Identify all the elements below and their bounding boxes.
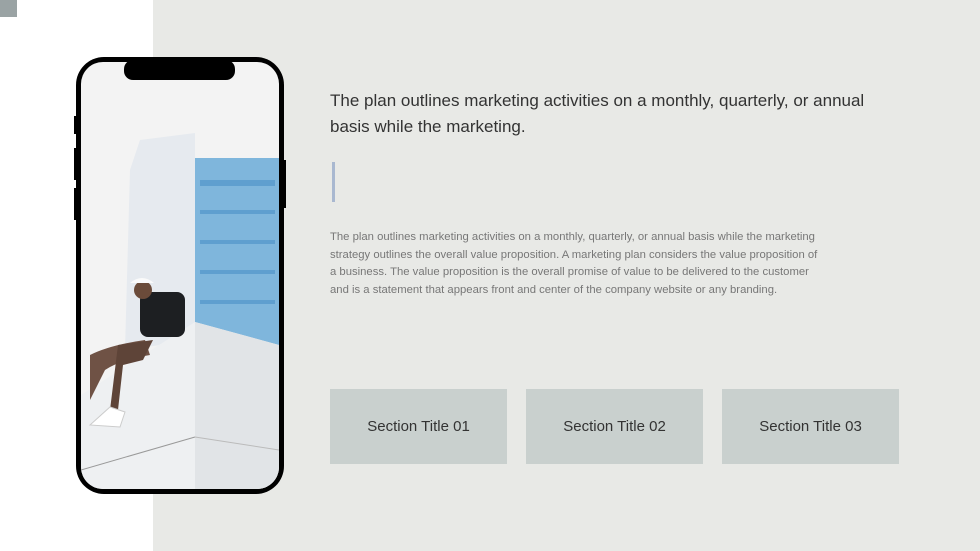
section box 2 [526, 389, 703, 464]
headline [330, 91, 864, 136]
headline: The plan outlines marketing activities on a monthly, quarterly, or annual [330, 91, 864, 110]
body paragraph [330, 231, 818, 296]
body paragraph: and is a statement that appears front and center of the company website or any branding. [330, 284, 777, 296]
section box 3: Section Title 03 [759, 418, 862, 435]
body paragraph: The plan outlines marketing activities on a monthly, quarterly, or annual basis while the marketing [330, 231, 815, 243]
section box 1 [330, 389, 507, 464]
phone mockup [74, 57, 286, 494]
corner square [0, 0, 17, 17]
headline: basis while the marketing. [330, 117, 526, 136]
section box 2: Section Title 02 [563, 418, 666, 435]
accent bar [332, 162, 335, 202]
section box 1: Section Title 01 [367, 418, 470, 435]
section box 3 [722, 389, 899, 464]
body paragraph: strategy outlines the overall value proposition. A marketing plan considers the value proposition of [330, 248, 817, 260]
body paragraph: a business. The value proposition is the overall promise of value to be delivered to the customer [330, 266, 809, 278]
